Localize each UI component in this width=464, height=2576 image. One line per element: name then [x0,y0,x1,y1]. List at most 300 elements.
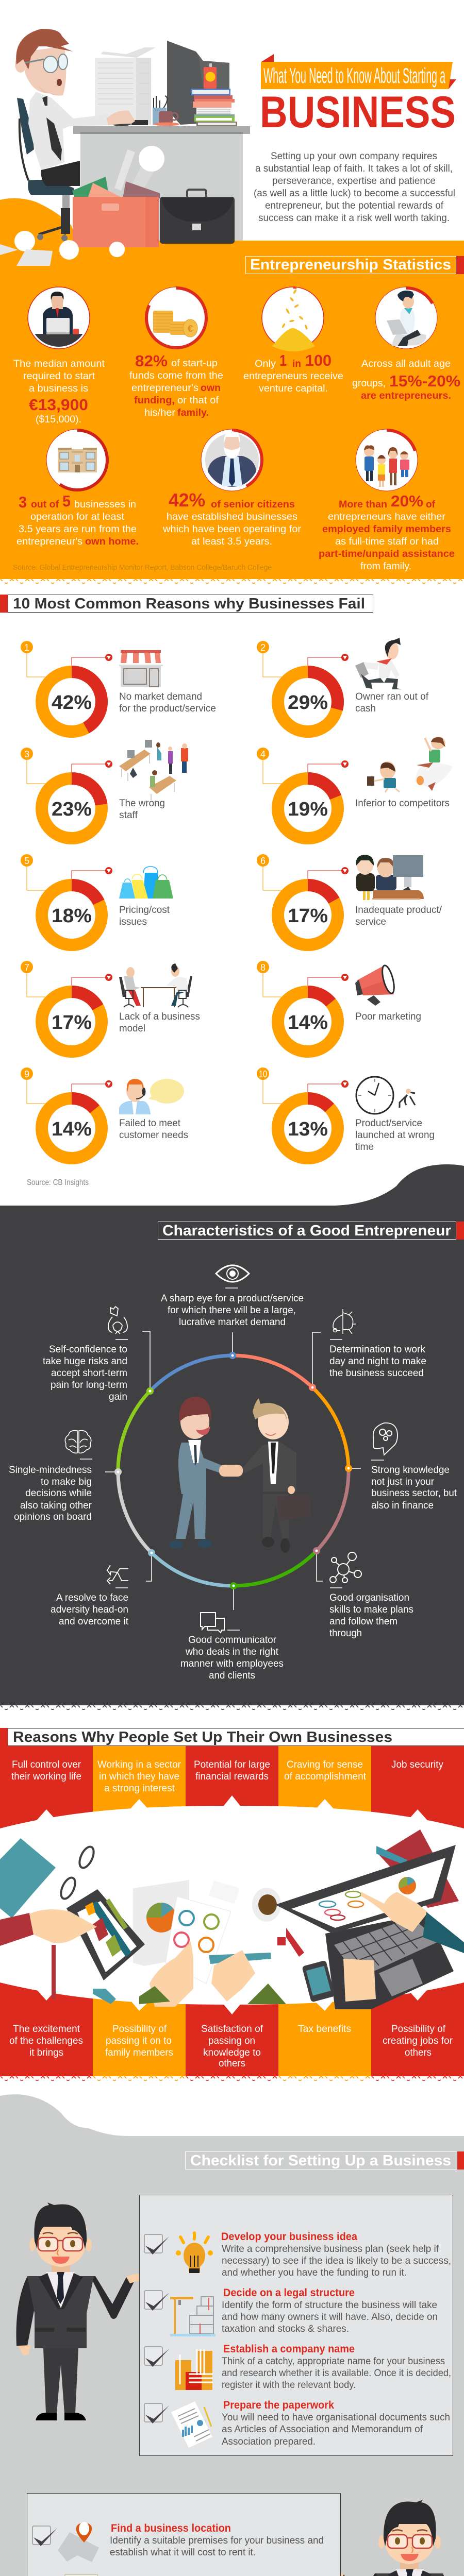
trait: single-mindedness: to make big [41,1476,92,1487]
ring nodes [114,1352,352,1589]
stat: 1 in 100: Only [255,358,276,369]
stat: 15%-20%: 15%-20% [389,372,460,390]
stat: 42% of senior citizens: 42% [169,489,205,511]
books [191,89,237,126]
stat: 82% of start-up funds: family. [177,407,209,418]
icon: two people at a desk [356,855,424,900]
number badge [21,748,45,784]
stat: 3 out of 5: 3.5 years are run from the [19,523,137,535]
pointer [72,867,112,879]
reason 8: 14%: Poor marketing [355,1011,421,1022]
paper stack [95,47,156,125]
pointer [72,1080,112,1092]
trait: determination: day and night to make [329,1355,426,1367]
number badge [257,854,281,890]
stat: 15%-20% [352,287,460,401]
reason 3: 23%: The wrong [119,798,165,809]
icon: checkbox [144,2291,169,2311]
trait: organisation [329,1552,413,1639]
heading: Characteristics of a Good Entrepreneur: Characteristics of a Good Entrepreneur [162,1223,451,1239]
item: business location: Identify a suitable premises for your business and [110,2535,324,2546]
stat: 82% of start-up funds: entrepreneur's [131,382,198,394]
reason texts: others [405,2047,432,2058]
stat: 1 in 100: 1 [279,351,287,369]
donut chart 13% [278,1098,338,1158]
reason texts: Working in a sector [97,1759,181,1770]
coloured columns [0,1745,464,2076]
reason 2: 29% [257,638,429,732]
reason 10: 13% [257,1067,435,1158]
trait: resolve: and overcome it [59,1616,129,1627]
donut chart 19%: 19% [288,799,328,820]
item: develop your business idea: and whether you have the funding to run it. [222,2267,407,2278]
icon: head with gears [373,1423,397,1455]
reason 7: 17%: Lack of a business [119,1011,200,1022]
donut chart 14% [42,1098,102,1158]
reason texts: of the challenges [9,2035,83,2046]
reason texts: The excitement [13,2023,80,2035]
stat: 42% of senior citizens: have established businesses [167,511,297,522]
icon: certificate [65,2574,97,2576]
donut chart 29%: 29% [288,692,328,714]
donut chart 18% [42,885,102,945]
donut chart 17% [42,992,102,1052]
item: prepare the paperwork: as Articles of Association and Memorandum of [222,2424,423,2435]
trait: determination [329,1309,426,1379]
trait: self-confidence: take huge risks and [43,1355,127,1367]
reason texts: a strong interest [104,1783,175,1794]
trait: sharp eye: A sharp eye for a product/service [161,1293,304,1304]
panel: dark characteristics section [0,1164,464,1705]
pointer [72,760,112,772]
decorative scallop [0,1705,464,1711]
icon: man with laptop [28,287,90,349]
donut chart 29% [278,672,338,732]
stat: 20% family members: as full-time staff or had [335,536,439,547]
icon: business meeting [119,963,192,1007]
trait: organisation: and follow them [329,1616,397,1627]
icon: office team [119,740,188,800]
trait: sharp eye [161,1265,304,1328]
source note: Source: Global Entrepreneurship Monitor Report, Babson College/Baruch College [13,563,272,572]
pointer [72,654,112,666]
donut chart 14% [278,992,338,1052]
reason texts [9,1759,453,2069]
stat: 42% of senior citizens [162,429,302,547]
reason texts: Potential for large [194,1759,270,1770]
stat: 3 out of 5: 5 [62,492,71,510]
source: CB Insights: Source: CB Insights [27,1178,89,1187]
stat: 1 in 100: 100 [305,351,332,369]
trait: organisation: Good organisation [329,1592,409,1603]
reason texts: it brings [29,2047,63,2058]
item: business location: Find a business location [111,2522,231,2534]
stat: median amount: required to start [23,370,95,382]
stat: 82% of start-up funds: 82% [135,352,168,370]
stat: 1 in 100: venture capital. [259,383,328,394]
desk [73,126,250,241]
number badge: 5 [24,856,29,866]
trait: organisation: skills to make plans [329,1604,413,1615]
trait: single-mindedness: decisions while [25,1487,92,1499]
icon: document with pencil [171,2401,212,2448]
panel: checklist section [0,2094,464,2576]
number badge [257,961,281,997]
number badge [257,748,281,784]
trait: strong knowledge: business sector, but [371,1487,457,1499]
trait: organisation: through [329,1628,362,1639]
stat: median amount: The median amount [13,358,105,369]
stat: 3 out of 5: own home. [85,536,139,547]
donut chart 23% [42,778,102,838]
reason 6: 17% [257,854,442,945]
trait: strong knowledge: also in finance [371,1500,434,1511]
stat: 3 out of 5: businesses in [74,499,136,510]
trait: self-confidence [43,1307,128,1402]
rolled plans and folders [72,146,164,198]
reason texts: Craving for sense [287,1759,363,1770]
icon: megaphone [355,964,396,1006]
number badge: 10 [259,1069,267,1079]
stat: 3 out of 5: operation for at least [30,511,125,522]
intro text: a substantial leap of faith. It takes a lot of skill, [255,163,453,174]
intro text: (as well as a little luck) to become a successful [254,188,455,199]
reason 3: 23%: staff [119,809,138,821]
stat: 42% of senior citizens: at least 3.5 years. [191,536,272,547]
item: develop your business idea: Write a comprehensive business plan (seek help if [222,2244,439,2255]
icon: clock and running man [356,1077,415,1114]
item: develop your business idea: Develop your business idea [221,2231,357,2243]
donut chart 17% [278,885,338,945]
item: prepare the paperwork [144,2399,450,2448]
reason 2: 29%: cash [355,703,376,714]
reason 10: 13%: launched at wrong [355,1129,435,1141]
icon: network [330,1552,361,1583]
donut chart 17%: 17% [52,1012,92,1033]
reason texts: family members [105,2047,173,2058]
reason 8: 14% [257,961,421,1052]
item: legal structure: Decide on a legal structure [223,2287,355,2299]
item: develop your business idea: necessary) to see if the idea is likely to be a success, [222,2256,451,2266]
icon: support agent [119,1079,184,1114]
connector lines [105,1331,361,1610]
stat: 82% of start-up funds: own [201,382,221,394]
number badge: 8 [260,962,266,973]
icon: crossing arrows [107,1565,128,1584]
pointer [308,760,349,772]
donut chart 19% [278,778,338,838]
stat: median amount: €13,900 [29,396,88,414]
decorative scallop [0,2076,464,2082]
stat: 82% of start-up funds: his/her [144,407,176,418]
donut chart 14%: 14% [52,1118,92,1140]
stat: 20% family members: part-time/unpaid assistance [319,548,455,560]
stat: 1 in 100: in [292,358,301,369]
reason 3: 23% [21,740,188,838]
intro text: success can make it a risk well worth taking. [258,212,450,224]
stat: 82% of start-up funds: funding, [134,395,175,406]
icon: shopping bags [119,867,173,899]
card: first checklist [139,2195,453,2455]
decorative scallop [0,579,464,585]
reason 7: 17%: model [119,1023,145,1034]
stat: 20% family members: 20% [391,492,423,510]
stat: 3 out of 5: entrepreneur's [16,536,82,547]
stat: 20% family members: employed family members [322,523,451,535]
intro text: entrepreneur, but the potential rewards of [265,200,444,211]
stat: 15%-20%: are entrepreneurs. [361,390,451,401]
number badge [21,641,45,677]
office chair [17,98,74,241]
reason 10: 13%: time [355,1141,374,1153]
pointer [308,867,349,879]
reason 5: 18%: issues [119,916,147,927]
icon: abstract logo bars [175,2349,213,2390]
trait: resolve: A resolve to face [56,1592,128,1603]
item: company name: register it with the relevant body. [222,2380,356,2391]
donut chart 42% [42,672,102,732]
icon: eye [216,1265,249,1282]
reason texts: passing it on to [106,2035,172,2046]
reason texts: Satisfaction of [201,2023,263,2035]
reason 6: 17%: Inadequate product/ [355,904,442,916]
stat: 20% family members [319,429,455,572]
icon: checkbox [144,2347,169,2367]
intro text [254,150,455,224]
trait: determination: the business succeed [329,1367,424,1379]
man [15,29,148,186]
item: legal structure: and how many owners it will have. Also, decide on [222,2312,438,2323]
icon: checkbox [144,2234,169,2255]
donut chart 23%: 23% [52,799,92,820]
stat: 15%-20%: groups, [352,378,386,389]
icon: senior man [201,429,263,491]
stat: 20% family members: from family. [360,561,411,572]
reason texts: creating jobs for [383,2035,453,2046]
reason 9: 14%: Failed to meet [119,1117,181,1129]
reason 7: 17% [21,961,200,1052]
stat: 3 out of 5: 3 [19,493,27,511]
stat: 1 in 100: entrepreneurs receive [243,370,343,382]
item: licensing [32,2574,339,2576]
stat: 82% of start-up funds: of start-up [171,358,218,369]
trait: strong knowledge: not just in your [371,1476,434,1487]
icon: running man [355,638,402,689]
stat: 82% of start-up funds: funds come from the [129,370,223,381]
stat: 82% of start-up funds [129,287,223,418]
reason texts: knowledge to [203,2047,261,2058]
number badge: 3 [24,749,29,759]
reason 10: 13%: Product/service [355,1117,422,1129]
trait: single-mindedness: opinions on board [14,1511,92,1522]
reason texts: others [219,2058,245,2069]
donut chart 17%: 17% [288,905,328,927]
stat: 3 out of 5 [16,429,139,547]
trait: strong knowledge [371,1423,457,1511]
item: business location [32,2522,324,2562]
stat: 82% of start-up funds: or that of [177,395,219,406]
trait: self-confidence: pain for long-term [51,1379,127,1391]
trait: determination: Determination to work [329,1344,425,1355]
icon: man sitting with laptop [375,287,437,349]
icon: store [119,650,163,687]
reason 4: 19% [257,737,453,838]
number badge [257,1067,281,1104]
reason texts: of accomplishment [284,1771,367,1782]
trait: strong knowledge: Strong knowledge [371,1464,450,1476]
heading: Entrepreneurship Statistics: Entrepreneurship Statistics [250,257,451,273]
number badge: 1 [24,642,29,653]
trait: good communicator: manner with employees [180,1658,284,1669]
item: company name: Establish a company name [223,2343,355,2355]
icon: construction crane and building [170,2297,216,2336]
reason texts: Tax benefits [298,2023,351,2035]
reason texts: Full control over [12,1759,81,1770]
number badge [21,1067,45,1104]
white ellipse area with pointers [0,1795,464,2014]
reason texts: in which they have [99,1771,179,1782]
reason 2: 29%: Owner ran out of [355,691,429,702]
illustration: two businessmen shaking hands [169,1397,311,1553]
item: legal structure: Identify the form of structure the business will take [222,2300,437,2311]
number badge [257,641,281,677]
icon: confident figure [108,1307,127,1334]
donut chart 18%: 18% [52,905,92,927]
icon: speech bubbles [201,1613,224,1633]
icon: rocket race [367,737,453,792]
stat: 20% family members: of [426,499,435,510]
reason 9: 14%: customer needs [119,1129,188,1141]
icon: family [356,429,418,491]
panel: reasons to set up a business [0,1728,464,2076]
illustration: stressed man at desk [0,29,250,266]
trait: single-mindedness [9,1431,92,1522]
heading: Checklist for Setting Up a Business: Checklist for Setting Up a Business [190,2153,451,2169]
reason 5: 18% [21,854,173,945]
icon: day and night [333,1309,356,1334]
intro text: perseverance, expertise and patience [272,175,436,187]
trait: self-confidence: gain [109,1391,127,1402]
stat: median amount: ($15,000). [36,414,81,425]
trait: sharp eye: lucrative market demand [179,1316,286,1328]
reason 6: 17%: service [355,916,386,927]
reason texts: financial rewards [195,1771,269,1782]
donut chart 42%: 42% [52,692,92,714]
donut chart 14%: 14% [288,1012,328,1033]
reason 1: 42%: for the product/service [119,703,216,714]
item: legal structure: taxation and stocks & shares. [222,2324,349,2334]
number badge: 7 [24,962,29,973]
stat: 20% family members: entrepreneurs have either [328,511,446,522]
title ribbon [261,54,456,89]
trait: resolve: adversity head-on [51,1604,128,1615]
trait: single-mindedness: also taking other [20,1500,92,1511]
pointer [72,974,112,986]
orange statistics band [0,198,464,579]
item: company name: and research whether it is available. Once it is decided, [222,2368,451,2379]
item: business location: establish what it will cost to rent it. [110,2547,256,2558]
number badge: 4 [260,749,266,759]
reason texts: Possibility of [391,2023,446,2035]
icon: coins [145,287,207,349]
number badge: 6 [260,856,266,866]
reason 1: 42%: No market demand [119,691,202,702]
trait: self-confidence: Self-confidence to [49,1344,127,1355]
item: prepare the paperwork: You will need to have organisational documents such [222,2412,450,2423]
trait: good communicator [180,1613,284,1681]
reason texts: Possibility of [112,2023,167,2035]
trait: self-confidence: accept short-term [51,1367,127,1379]
number badge: 2 [260,642,266,653]
reason 5: 18%: Pricing/cost [119,904,170,916]
trait: good communicator: who deals in the right [185,1646,279,1657]
icon: falling coins [262,287,324,351]
reason texts: their working life [11,1771,81,1782]
icon: checkbox [32,2526,57,2546]
item: prepare the paperwork: Association prepared. [222,2436,316,2447]
illustration: presenter man left [16,2202,157,2420]
stat: median amount: a business is [29,383,88,394]
stat: 42% of senior citizens: of senior citizens [211,499,295,510]
stat: 1 in 100 [243,287,343,394]
illustration: presenter man right [313,2500,454,2576]
item: company name [144,2343,451,2391]
monitor [167,41,229,125]
soda can [204,63,217,89]
trait: resolve [51,1565,129,1627]
heading: 10 Most Common Reasons: 10 Most Common Reasons why Businesses Fail [13,596,365,612]
stat: 3 out of 5: out of [31,499,59,510]
trait: single-mindedness: Single-mindedness [9,1464,92,1476]
heading: Reasons Why People Set Up: Reasons Why People Set Up Their Own Businesses [13,1729,392,1745]
item: company name: Think of a catchy, appropriate name for your business [222,2356,445,2367]
crumpled paper [0,231,125,266]
icon: home office building [46,429,108,491]
reason texts: Job security [391,1759,443,1770]
donut chart 13%: 13% [288,1118,328,1140]
icon: light bulb [176,2233,213,2273]
stat: 20% family members: More than [339,499,387,510]
pointer [308,1080,349,1092]
icon: coins: € [188,324,193,334]
reason 9: 14% [21,1067,188,1158]
circular ring with nodes [118,1355,349,1586]
reason 1: 42% [21,641,216,732]
trait: sharp eye: for which there will be a large, [168,1304,296,1316]
briefcase [160,190,235,244]
pointer [308,974,349,986]
icon: checkbox [144,2403,169,2424]
icon: brain [65,1431,91,1453]
reason 4: 19%: Inferior to competitors [355,798,450,809]
trait: good communicator: and clients [209,1670,255,1681]
stat: 15%-20%: Across all adult age [361,358,451,369]
number badge [21,961,45,997]
item: legal structure [144,2287,438,2336]
stat: 42% of senior citizens: which have been operating for [162,523,302,535]
illustration: team at a table [0,1829,464,2009]
number badge: 9 [24,1069,29,1079]
pen cup and mug [153,96,179,126]
item: prepare the paperwork: Prepare the paperwork [223,2399,334,2411]
number badge [21,854,45,890]
item: develop your business idea [144,2231,451,2278]
trait: good communicator: Good communicator [188,1634,276,1646]
stat: median amount [13,287,105,425]
cardboard box [73,197,159,247]
reason texts: passing on [208,2035,255,2046]
icon: map pin [58,2522,99,2562]
